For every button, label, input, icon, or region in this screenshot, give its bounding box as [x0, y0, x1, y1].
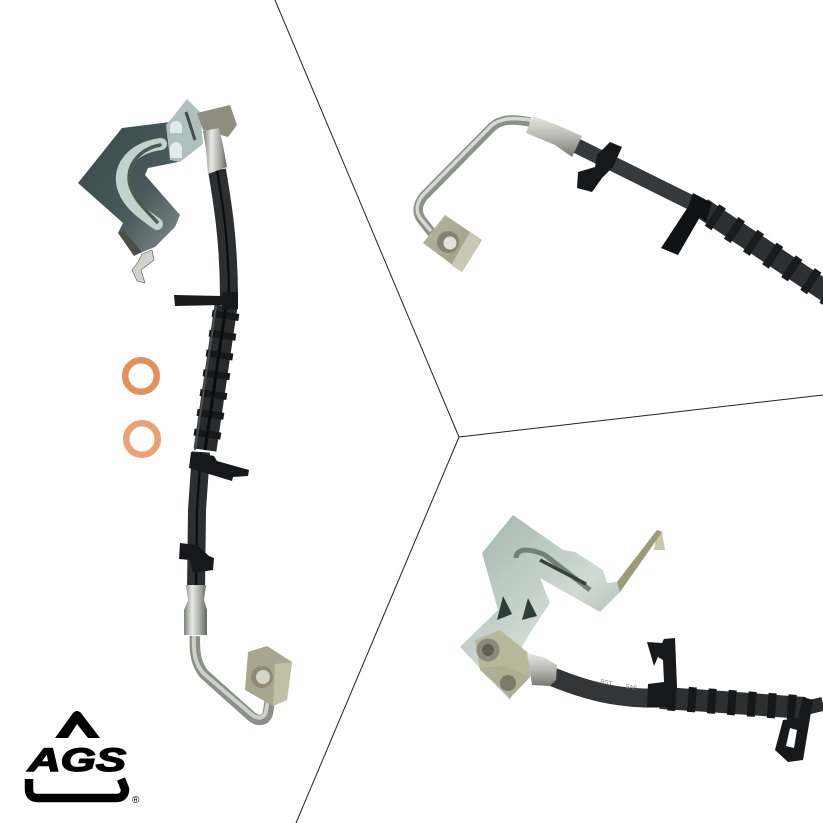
icon: ferrule: [526, 116, 582, 157]
panel: bracket end close-up: [460, 515, 823, 762]
icon: ferrule: [527, 653, 557, 686]
icon: lower plastic clip: [179, 543, 214, 573]
icon: copper washer upper: [125, 360, 157, 392]
icon: lower ferrule: [184, 585, 207, 635]
icon: steel pipe: [417, 119, 530, 233]
icon: copper washer lower: [126, 423, 158, 455]
logo wordmark: AGS: [27, 742, 127, 778]
icon: plastic clip upper: [647, 638, 677, 707]
corrugated hose guard: [195, 306, 226, 450]
hose section with print: RST: [600, 679, 613, 688]
panel: pipe end close-up: [417, 116, 823, 294]
divider line: centre to right: [459, 395, 823, 437]
corrugated hose guard: [660, 698, 823, 708]
icon: mounting bracket: [460, 515, 665, 700]
icon: plastic clip lower: [661, 193, 712, 255]
icon: plastic clip lower: [775, 697, 813, 762]
hose section: [575, 145, 700, 207]
icon: upper banjo block: [197, 105, 237, 137]
icon: square fitting: [423, 215, 482, 272]
upper hose section: [217, 170, 229, 298]
logo top chevron: [55, 711, 100, 738]
icon: upper ferrule: [203, 128, 227, 174]
divider line: top to centre: [275, 0, 459, 437]
icon: banjo block with ports: [475, 630, 533, 698]
icon: lower steel pipe: [194, 636, 270, 720]
logo registered mark: ®: [132, 795, 140, 806]
divider line: centre to bottom: [296, 437, 459, 823]
logo: AGS: [27, 711, 140, 806]
icon: upper plastic clip: [174, 292, 238, 310]
hose section with print: [553, 677, 660, 698]
icon: plastic clip upper: [577, 142, 622, 192]
corrugated hose guard: [702, 208, 823, 294]
hose section with print: SAE: [625, 684, 638, 692]
logo bottom bracket: [29, 779, 125, 798]
panel: full brake hose assembly view: [78, 99, 292, 720]
icon: middle plastic clip: [189, 452, 249, 481]
icon: mounting bracket: [78, 99, 203, 283]
icon: lower banjo block: [245, 646, 292, 706]
lower hose section: [196, 452, 201, 590]
